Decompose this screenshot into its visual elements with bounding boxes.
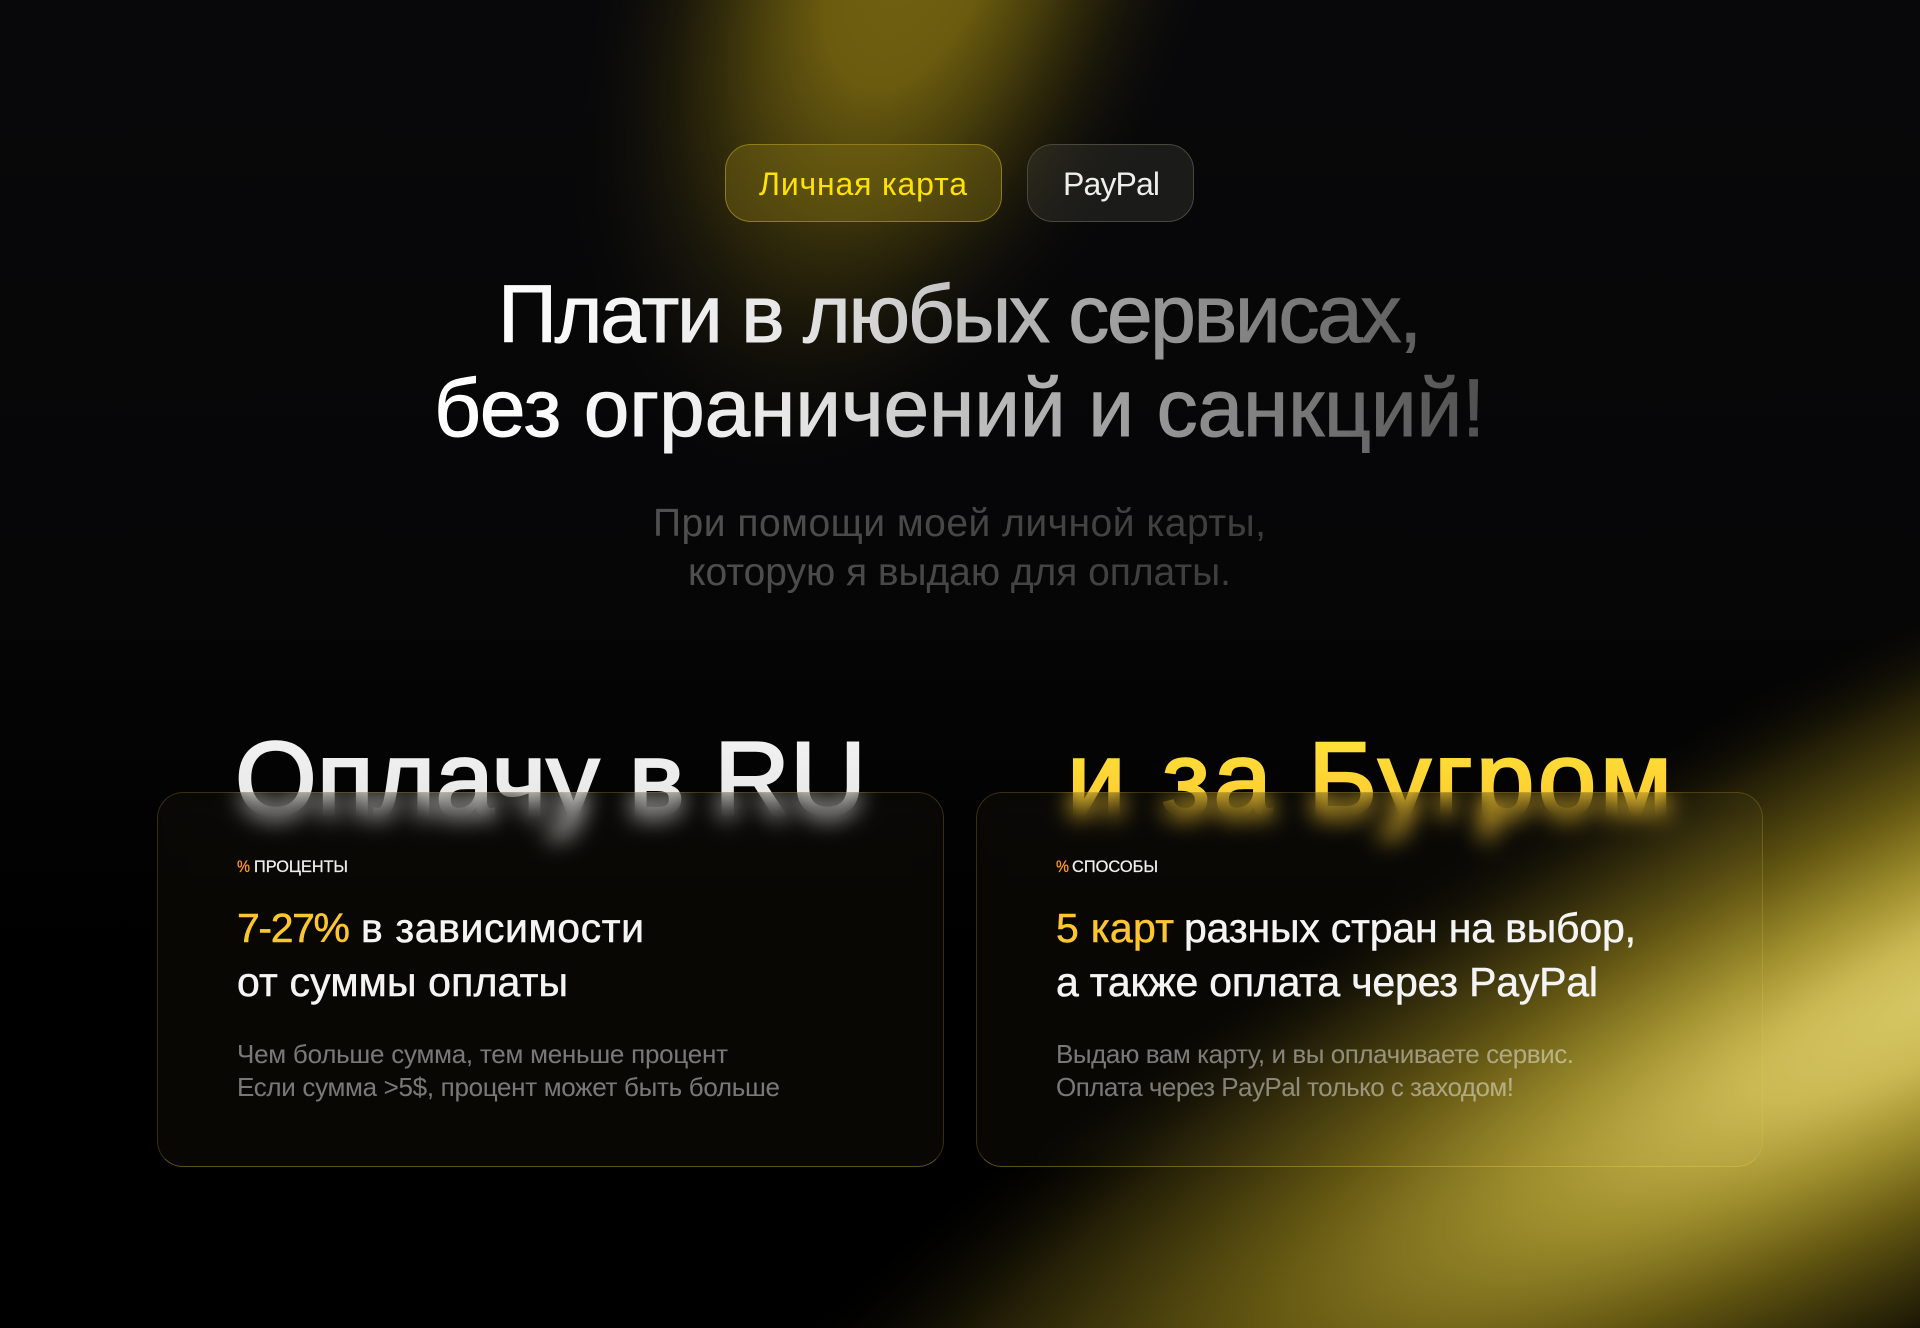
tag: проценты: ПРОЦЕНТЫ [254, 857, 348, 876]
title: Плати в любых сервисах, [498, 269, 1422, 360]
description: Выдаю вам карту, и вы оплачиваете сервис. [1056, 1039, 1574, 1069]
tag: способы: СПОСОБЫ [1072, 857, 1158, 876]
panel: способы [976, 792, 1763, 1167]
big heading: и за Бугром: и за Бугром [1067, 721, 1672, 838]
heading: 5 карт: а также оплата через PayPal [1056, 959, 1598, 1005]
heading: 7-27% [237, 905, 644, 1005]
tag: способы: % [1056, 857, 1069, 876]
tab label: PayPal: PayPal [1063, 166, 1160, 202]
subtitle: При помощи моей личной карты, [653, 502, 1266, 545]
description: Оплата через PayPal только с заходом! [1056, 1072, 1514, 1102]
heading: 5 карт: 5 карт [1056, 905, 1174, 951]
description [237, 1039, 780, 1102]
tab label: Личная карта: Личная карта [759, 166, 967, 202]
description: Если сумма >5$, процент может быть больше [237, 1072, 780, 1102]
panel: проценты [157, 792, 944, 1167]
heading: 7-27%: в зависимости [361, 905, 644, 951]
title: без ограничений и санкций! [434, 363, 1485, 454]
description [1056, 1039, 1574, 1102]
title [434, 269, 1485, 454]
top glow [0, 0, 1920, 700]
heading: 7-27%: от суммы оплаты [237, 959, 568, 1005]
tab: PayPal [1027, 144, 1194, 222]
heading: 5 карт: разных стран на выбор, [1184, 905, 1636, 951]
description: Чем больше сумма, тем меньше процент [237, 1039, 728, 1069]
tab: Личная карта [725, 144, 1002, 222]
tag: проценты: % [237, 857, 250, 876]
heading: 5 карт [1056, 905, 1636, 1005]
subtitle [653, 502, 1266, 594]
big heading: Оплачу в RU: Оплачу в RU [235, 721, 866, 838]
heading: 7-27%: 7-27% [237, 905, 350, 951]
subtitle: которую я выдаю для оплаты. [688, 551, 1231, 594]
